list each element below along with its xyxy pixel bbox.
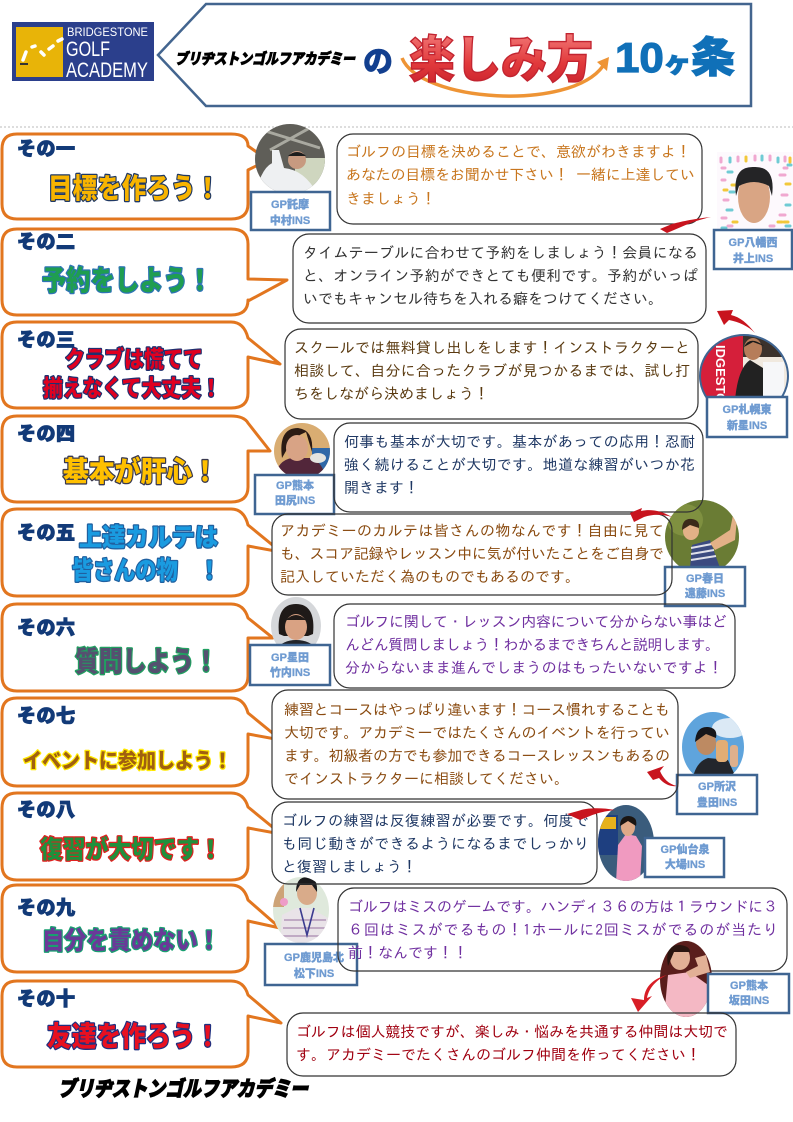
- label: 遠藤INS: [665, 567, 745, 606]
- number: その六: その六: [17, 617, 75, 639]
- label: 中村INS: [251, 192, 330, 230]
- number: その七: その七: [17, 705, 75, 727]
- label: 大場INS: GP仙台泉: [661, 842, 709, 856]
- header title: ブリヂストンゴルフアカデミー: [174, 50, 358, 68]
- photo: instructor Niihoshi: [699, 334, 789, 398]
- number: その五: その五: [17, 523, 75, 544]
- heading: 予約をしよう: 予約をしよう！: [42, 265, 212, 296]
- bubble 1: goals text: [337, 134, 702, 224]
- bubble 8: review text: も同じ動きができるようになるまでしっかり: [282, 836, 589, 851]
- label: 竹内INS: 竹内INS: [270, 665, 310, 679]
- label: 新星INS: [707, 397, 787, 437]
- header title: 10ヶ条: [615, 34, 735, 81]
- callout 1: goal: [2, 134, 268, 219]
- bubble 7: events text: 大切です。アカデミーではたくさんのイベントを行ってい: [284, 725, 670, 740]
- photo: instructor Toyoda: [682, 712, 744, 774]
- arrow: Niihoshi to bubble: [717, 310, 755, 333]
- callout 10: friends: [2, 981, 281, 1067]
- label: 坂田INS: GP熊本: [730, 978, 768, 992]
- bubble 7: events text: 練習とコースはやっぱり違います！コース慣れすることも: [284, 702, 670, 717]
- label: 竹内INS: [250, 645, 330, 685]
- heading: クラブは慌てて 揃えなくて大丈夫: 揃えなくて大丈夫！: [43, 375, 221, 401]
- bubble 6: questions text: 分からないまま進んでしまうのはもったいないですよ！: [345, 660, 723, 675]
- bubble 1: goals text: きましょう！: [346, 191, 436, 206]
- bubble 5: karte text: [272, 514, 672, 595]
- photo: instructor Inoue: [717, 152, 793, 230]
- label: 松下INS: [265, 944, 357, 985]
- label: 坂田INS: [708, 974, 789, 1013]
- callout 4: basics: [2, 416, 270, 502]
- footer wordmark: ブリヂストンゴルフアカデミー: [57, 1076, 312, 1101]
- bubble 6: questions text: んどん質問しましょう！わかるまできちんと説明します。: [345, 637, 720, 652]
- label: 井上INS: GP八幡西: [729, 235, 777, 249]
- bubble 5: karte text: 記入していただく為のものでもあるのです。: [280, 569, 580, 584]
- heading: 目標を作ろう: 目標を作ろう！: [48, 173, 220, 204]
- number: その一: その一: [17, 139, 75, 160]
- number: その九: その九: [17, 897, 75, 919]
- bubble 6: questions text: ゴルフに関して・レッスン内容について分からない事はど: [345, 614, 727, 629]
- bubble backgrounds: [272, 134, 787, 1076]
- bubble 8: review text: と復習しましょう！: [282, 859, 417, 874]
- label: 豊田INS: 豊田INS: [697, 795, 737, 809]
- arrow: Sakata to bubble: [631, 975, 667, 1012]
- heading: 自分を責めない: 自分を責めない！: [42, 927, 220, 955]
- photo: instructor Endo: [665, 500, 739, 566]
- bubble 4: basics text: 開きます！: [344, 480, 419, 495]
- heading: イベントに参加しよう: イベントに参加しよう！: [23, 750, 232, 773]
- label: 井上INS: [714, 230, 792, 269]
- number: その十: その十: [17, 988, 75, 1010]
- label: 新星INS: 新星INS: [727, 418, 767, 432]
- callout 5: karte: [2, 509, 281, 596]
- bubble 10: friends text: ゴルフは個人競技ですが、楽しみ・悩みを共通する仲間は大切で: [296, 1024, 728, 1039]
- bubble 2: reservation text: いでもキャンセル待ちを入れる癖をつけてください。: [303, 291, 663, 306]
- bubble 9: mistakes text: ６回はミスがでるもの！1ホールに2回ミスがでるのが当たり: [348, 922, 778, 937]
- label: 中村INS: GP託摩: [271, 197, 309, 211]
- label: 大場INS: [645, 838, 724, 877]
- heading: 友達を作ろう: 友達を作ろう！: [47, 1021, 220, 1052]
- arrow: Inoue to bubble: [660, 217, 711, 233]
- heading: クラブは慌てて 揃えなくて大丈夫: [43, 346, 221, 401]
- arrow: Toyoda to bubble: [647, 766, 677, 786]
- bubble 5: karte text: も、スコア記録やレッスン中に気が付いたことをご自身で: [280, 546, 664, 561]
- number: その二: その二: [17, 232, 75, 253]
- bubble 9: mistakes text: ゴルフはミスのゲームです。ハンディ３６の方は１ラウンドに３: [348, 899, 778, 914]
- header title: [174, 32, 735, 96]
- heading: 上達カルテは 皆さんの物: 上達カルテは: [79, 524, 218, 552]
- arrow: Oba to bubble: [567, 808, 615, 820]
- callout 9: don't blame yourself: [2, 885, 280, 972]
- photo: instructor Niihoshi: IDGESTO: [713, 345, 728, 403]
- bubble 7: events text: ます。初級者の方でも参加できるコースレッスンもあるの: [284, 748, 670, 763]
- photo: instructor Nakamura: [255, 124, 325, 191]
- photo: instructor Matsushita: [272, 877, 330, 944]
- label: 坂田INS: 坂田INS: [729, 994, 769, 1007]
- header banner arrow panel: [158, 4, 751, 106]
- label: 遠藤INS: GP春日: [686, 571, 724, 585]
- number: その三: その三: [17, 330, 75, 351]
- bubble 4: basics text: 何事も基本が大切です。基本があっての応用！忍耐: [344, 434, 695, 449]
- heading: 基本が肝心: 基本が肝心！: [63, 455, 218, 487]
- header logo: Bridgestone Golf Academy: [12, 22, 154, 82]
- label: 中村INS: 中村INS: [270, 213, 310, 227]
- bubble 10: friends text: [287, 1013, 736, 1076]
- heading: 復習が大切です: 復習が大切です！: [40, 835, 222, 864]
- label: 井上INS: 井上INS: [733, 251, 773, 265]
- bubble 4: basics text: [334, 423, 703, 512]
- bubble 1: goals text: あなたの目標をお聞かせ下さい！ 一緒に上達してい: [346, 167, 695, 182]
- bubble 9: mistakes text: 前！なんです！！: [348, 945, 468, 960]
- callout 8: review: [2, 793, 281, 880]
- bubble 10: friends text: す。アカデミーでたくさんのゴルフ仲間を作ってください！: [296, 1047, 701, 1062]
- photo: instructor Oba: [598, 805, 654, 883]
- bubble 3: clubs text: スクールでは無料貸し出しをします！インストラクターと: [294, 340, 690, 355]
- number: その四: その四: [17, 424, 75, 445]
- bubble 3: clubs text: 相談して、自分に合ったクラブが見つかるまでは、試し打: [294, 363, 690, 378]
- bubble 9: mistakes text: [338, 888, 787, 971]
- bubble 3: clubs text: ちをしながら決めましょう！: [294, 386, 489, 401]
- callout 6: questions: [2, 604, 273, 691]
- header title: 楽しみ方: [409, 32, 593, 88]
- callout 3: clubs: [2, 322, 280, 408]
- heading: 質問しよう: 質問しよう！: [75, 646, 218, 677]
- bubble 1: goals text: ゴルフの目標を決めることで、意欲がわきますよ！: [346, 144, 691, 159]
- bubble 8: review text: ゴルフの練習は反復練習が必要です。何度で: [282, 813, 589, 828]
- label: 松下INS: GP鹿児島北: [284, 950, 344, 964]
- bubble 7: events text: でインストラクターに相談してください。: [284, 771, 569, 786]
- photo: instructor Sakata: [660, 941, 712, 1019]
- bubble 7: events text: [272, 690, 678, 799]
- bubble 5: karte text: アカデミーのカルテは皆さんの物なんです！自由に見て: [280, 523, 664, 538]
- label: 田尻INS: GP熊本: [276, 478, 314, 492]
- label: 松下INS: 松下INS: [294, 966, 334, 980]
- callout 2: reservation: [2, 229, 287, 315]
- label: 田尻INS: [255, 475, 334, 514]
- header logo: Bridgestone Golf Academy: GOLF: [66, 38, 110, 61]
- number: その八: その八: [17, 800, 75, 821]
- heading: 上達カルテは 皆さんの物: [72, 524, 220, 585]
- heading: 上達カルテは 皆さんの物: 皆さんの物 ！: [72, 557, 220, 585]
- header logo: Bridgestone Golf Academy: ACADEMY: [66, 59, 148, 82]
- bubble 3: clubs text: [285, 329, 698, 419]
- label: 竹内INS: GP星田: [271, 651, 309, 664]
- bubble 6: questions text: [334, 604, 735, 688]
- header logo: Bridgestone Golf Academy: BRIDGESTONE: [67, 27, 148, 39]
- label: 田尻INS: 田尻INS: [275, 494, 315, 507]
- photo: instructor Tajiri: [274, 423, 330, 479]
- bubble 2: reservation text: タイムテーブルに合わせて予約をしましょう！会員になる: [303, 245, 698, 260]
- bubble 8: review text: [272, 802, 597, 884]
- header title: の: [363, 46, 393, 79]
- photo: instructor Takeuchi: [271, 597, 321, 644]
- bubble 2: reservation text: [293, 234, 706, 323]
- bubble 4: basics text: 強く続けることが大切です。地道な練習がいつか花: [344, 457, 695, 472]
- label: 新星INS: GP札幌東: [723, 402, 771, 416]
- label: 遠藤INS: 遠藤INS: [685, 586, 725, 600]
- label: 豊田INS: GP所沢: [698, 779, 736, 793]
- callout 7: events: [2, 698, 281, 786]
- label: 豊田INS: [677, 775, 757, 814]
- arrow: Endo to bubble: [630, 508, 672, 522]
- heading: クラブは慌てて 揃えなくて大丈夫: クラブは慌てて: [65, 346, 203, 372]
- bubble 2: reservation text: と、オンライン予約ができとても便利です。予約がいっぱ: [303, 268, 698, 283]
- label: 大場INS: 大場INS: [665, 857, 705, 871]
